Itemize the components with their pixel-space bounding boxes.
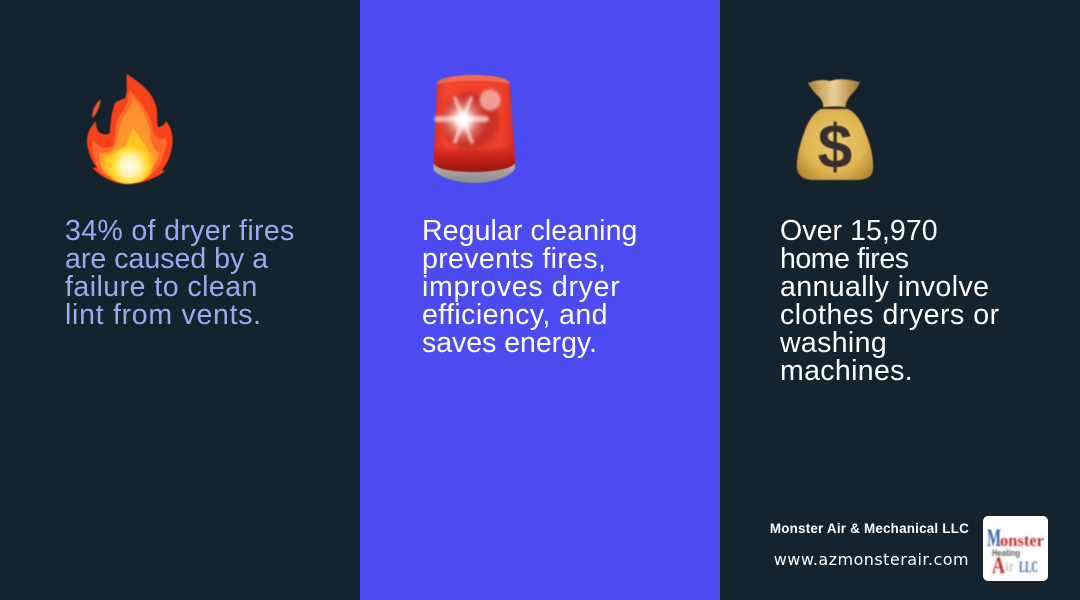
text: lint statistic: 34% of dryer fires [65,215,295,247]
text: cleaning benefits [422,215,638,359]
text: home fire statistic: Over 15,970 [780,215,938,247]
logo: Monster Air [983,516,1048,581]
text: home fire statistic: clothes dryers or [780,299,1000,331]
logo: Monster Air: A [992,553,1005,578]
text: cleaning benefits: improves dryer [422,271,620,303]
footer: company name: Monster Air & Mechanical LLC [770,521,969,536]
text: cleaning benefits: saves energy. [422,327,597,359]
text: cleaning benefits: efficiency, and [422,299,608,331]
logo: Monster Air: onster [1000,531,1044,550]
panel: home fires [720,0,1080,600]
text: lint statistic [65,215,295,331]
text: home fire statistic: machines. [780,355,913,387]
text: cleaning benefits: prevents fires, [422,243,606,275]
dollar sign: $ [818,113,852,182]
text: lint statistic: failure to clean [65,271,258,303]
text: home fire statistic: washing [780,327,887,359]
logo: Monster Air: Heating [992,548,1020,558]
text: lint statistic: lint from vents. [65,299,262,331]
text: home fire statistic [780,215,1000,387]
text: home fire statistic: home fires [780,243,909,275]
logo: Monster Air: ir [1005,560,1014,575]
logo: Monster Air: M [987,525,1001,552]
panel: lint fires [0,0,360,600]
icon: red siren light [432,74,516,184]
icon: money bag [796,78,874,182]
footer: website: www.azmonsterair.com [774,550,969,569]
text: lint statistic: are caused by a [65,243,268,275]
text: cleaning benefits: Regular cleaning [422,215,638,247]
panel: regular cleaning [360,0,720,600]
text: home fire statistic: annually involve [780,271,989,303]
